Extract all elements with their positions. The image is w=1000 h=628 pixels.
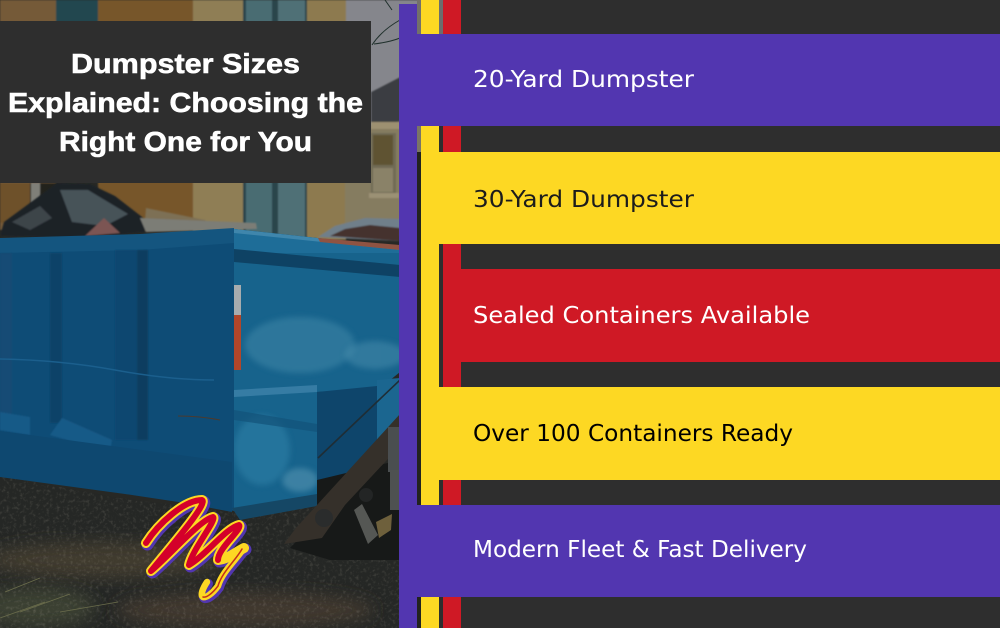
bar: Modern Fleet & Fast Delivery: Modern Fleet & Fast Delivery <box>473 537 807 563</box>
vertical purple strip <box>399 4 417 628</box>
bar: Sealed Containers Available: Sealed Containers Available <box>473 303 810 329</box>
side face <box>234 229 400 511</box>
bar: Over 100 Containers Ready: Over 100 Containers Ready <box>473 421 793 447</box>
recessed side panel <box>317 386 377 480</box>
bar: 30-Yard Dumpster: 30-Yard Dumpster <box>473 187 695 213</box>
title heading: Dumpster Sizes <box>71 48 300 79</box>
bar: 30-Yard Dumpster <box>421 152 1000 244</box>
gap sliver beside yellow strip <box>439 0 443 34</box>
title heading <box>8 48 363 157</box>
bare tree branches <box>372 0 400 45</box>
title panel <box>0 21 371 183</box>
bar: 20-Yard Dumpster <box>399 34 1000 126</box>
logo: stylised M monogram <box>146 500 246 599</box>
bar: Over 100 Containers Ready <box>421 387 1000 480</box>
ground <box>0 470 421 628</box>
title heading: Right One for You <box>59 126 312 157</box>
front face <box>0 229 234 511</box>
red reflector strip <box>234 285 241 315</box>
right panel background <box>461 0 1000 628</box>
building wall and sky <box>0 0 421 241</box>
roll-off equipment <box>284 380 400 560</box>
trash bags on dumpster <box>0 183 257 238</box>
bar: Sealed Containers Available <box>443 269 1000 362</box>
photo: blue dumpster outside a house under construction <box>0 0 421 628</box>
bar: Modern Fleet & Fast Delivery <box>399 505 1000 597</box>
vertical yellow strip <box>421 0 439 628</box>
bar: 20-Yard Dumpster: 20-Yard Dumpster <box>473 67 695 93</box>
gap slivers beside the purple strip <box>417 0 421 34</box>
title heading: Explained: Choosing the <box>8 87 363 118</box>
dumpster <box>0 228 405 520</box>
vertical red strip <box>443 0 461 628</box>
dumpster rust strip <box>318 238 400 250</box>
